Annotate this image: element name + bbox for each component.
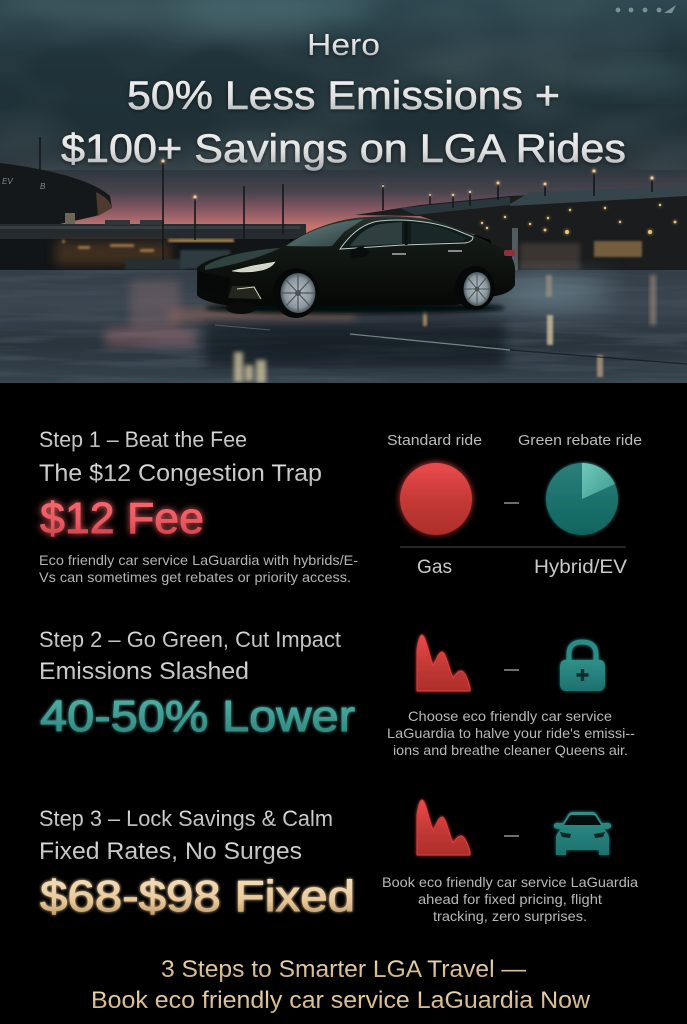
hero title	[61, 74, 626, 171]
dash separator	[504, 835, 519, 837]
rear wheel	[455, 266, 495, 310]
hero photo: car on wet airport tarmac at dusk	[0, 0, 687, 383]
step 1 body copy	[39, 552, 358, 585]
hero title: 50% Less Emissions +	[127, 74, 560, 118]
icon: window dots and plane mark	[616, 5, 676, 13]
left terminal building: EV	[2, 177, 13, 186]
hero eyebrow: Hero: Hero	[307, 27, 380, 62]
step 3 icons and copy	[382, 800, 638, 924]
step 2 text panel	[39, 627, 355, 741]
black sedan	[197, 216, 515, 318]
icon: red emissions peaks	[417, 800, 470, 855]
step 1 subheading: The $12 Congestion Trap	[39, 460, 322, 487]
stormy sky	[0, 0, 687, 235]
dash separator	[504, 669, 519, 671]
step 2 heading: Step 2 – Go Green, Cut Impact	[39, 627, 341, 652]
icon: red emissions peaks	[417, 635, 470, 691]
step 2 subheading: Emissions Slashed	[39, 658, 249, 685]
label: gas: Gas	[417, 557, 452, 578]
step 3 body copy: ahead for fixed pricing, flight	[418, 891, 602, 907]
step 2 body copy: ions and breathe cleaner Queens air.	[393, 742, 628, 758]
step 2 body copy	[387, 708, 635, 758]
icon: teal car front	[554, 812, 611, 855]
step 1 comparison chart	[387, 432, 642, 578]
right terminal building	[355, 186, 687, 272]
step 1 heading: Step 1 – Beat the Fee	[39, 427, 247, 452]
step 3 text panel	[39, 806, 355, 921]
step 3 body copy	[382, 874, 638, 924]
step 2 body copy: LaGuardia to halve your ride's emissi--	[387, 725, 635, 741]
step 3 heading: Step 3 – Lock Savings & Calm	[39, 806, 333, 831]
red gas circle	[400, 463, 472, 535]
step 1 big stat: $12 Fee	[40, 494, 204, 543]
label: hybrid/EV: Hybrid/EV	[534, 557, 627, 578]
label: standard ride: Standard ride	[387, 432, 482, 449]
step 3 big stat: $68-$98 Fixed	[40, 872, 355, 921]
teal hybrid pie chart	[546, 463, 618, 535]
step 1 body copy: Vs can sometimes get rebates or priority access.	[39, 569, 351, 585]
label: green rebate ride: Green rebate ride	[518, 432, 642, 449]
footer call to action	[91, 956, 591, 1014]
step 2 icons and copy	[387, 635, 635, 758]
dash separator	[504, 502, 519, 504]
icon: teal padlock with plus	[560, 642, 605, 691]
step 2 body copy: Choose eco friendly car service	[408, 708, 612, 724]
step 3 subheading: Fixed Rates, No Surges	[39, 838, 302, 865]
left terminal building: B	[40, 182, 46, 191]
front wheel	[276, 268, 316, 318]
step 1 text panel	[39, 427, 358, 585]
step 1 body copy: Eco friendly car service LaGuardia with hybrids/E-	[39, 552, 358, 568]
step 3 body copy: tracking, zero surprises.	[433, 908, 587, 924]
footer call to action: Book eco friendly car service LaGuardia Now	[91, 987, 591, 1014]
step 2 big stat: 40-50% Lower	[40, 692, 355, 741]
light poles	[40, 137, 654, 260]
step 3 body copy: Book eco friendly car service LaGuardia	[382, 874, 638, 890]
footer call to action: 3 Steps to Smarter LGA Travel —	[161, 956, 526, 983]
left terminal building	[0, 163, 306, 271]
wet pavement with reflections	[0, 270, 687, 383]
hero title: $100+ Savings on LGA Rides	[61, 127, 626, 171]
